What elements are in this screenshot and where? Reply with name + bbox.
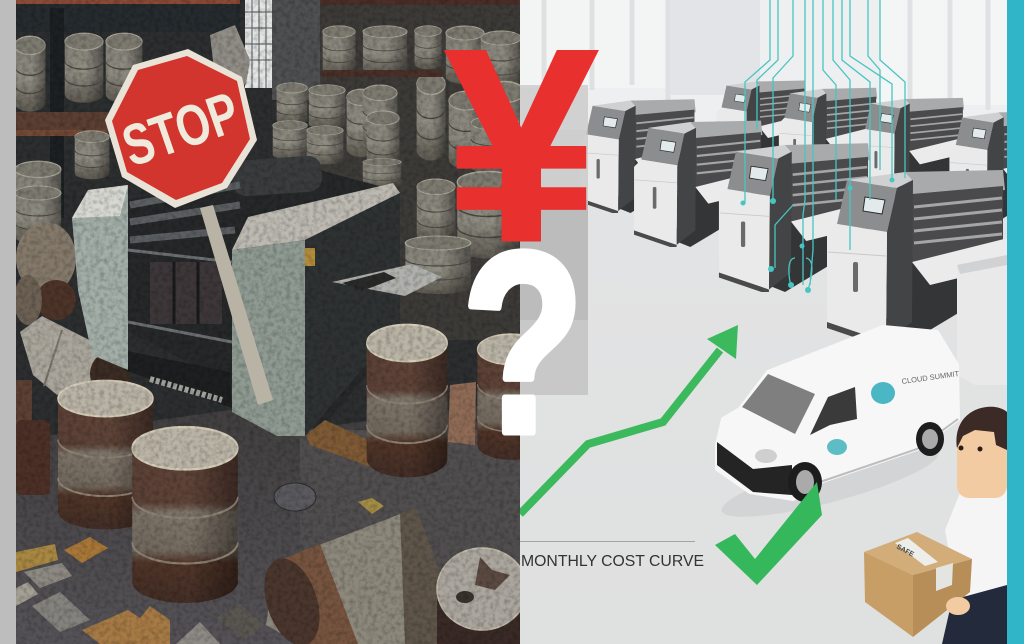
van logo xyxy=(871,382,895,404)
yen symbol: ¥ xyxy=(445,0,599,299)
stop sign xyxy=(105,49,273,405)
press 1 xyxy=(580,99,698,215)
back wall and windows xyxy=(520,0,1007,130)
wall column xyxy=(272,0,320,100)
old printing press xyxy=(72,155,442,436)
scattered papers xyxy=(16,498,384,644)
cardboard box xyxy=(864,532,972,637)
caption rule xyxy=(520,541,695,542)
panel: derelict warehouse xyxy=(14,0,545,644)
panel: modern print room xyxy=(520,0,1024,644)
cost curve arrow xyxy=(520,325,738,514)
question mark: ? xyxy=(462,200,584,488)
press 4 xyxy=(827,170,1008,348)
floor xyxy=(16,406,478,644)
warehouse window xyxy=(245,0,272,88)
stop label: STOP xyxy=(114,80,247,179)
press 2 xyxy=(634,121,765,249)
fallen drum upper left xyxy=(20,316,130,396)
drum centre xyxy=(367,325,447,477)
left gray margin xyxy=(0,0,16,644)
van lettering: CLOUD SUMMIT xyxy=(901,369,960,386)
worker xyxy=(942,407,1007,644)
shelved drums xyxy=(15,25,524,294)
drum bottom right xyxy=(437,548,527,644)
back row presses xyxy=(716,80,1024,223)
drum front xyxy=(132,427,238,603)
faded grey overlay xyxy=(520,85,588,395)
drum right xyxy=(476,333,520,460)
stray manhole disc xyxy=(274,483,316,511)
right teal margin xyxy=(1007,0,1024,644)
rear stacked drums left xyxy=(14,222,76,495)
box label: SAFE xyxy=(895,544,915,559)
caption: monthly cost curve: MONTHLY COST CURVE xyxy=(521,553,704,570)
press 3 xyxy=(719,143,872,295)
delivery van xyxy=(717,327,960,530)
van door logo xyxy=(827,439,847,455)
paper stack unit xyxy=(957,255,1007,314)
wood pallet and carton xyxy=(306,382,476,473)
drum back left xyxy=(58,381,153,529)
fallen drum bottom xyxy=(254,508,446,644)
digital circuit lines xyxy=(740,0,905,293)
grime texture xyxy=(16,0,520,644)
green check mark xyxy=(715,482,822,585)
